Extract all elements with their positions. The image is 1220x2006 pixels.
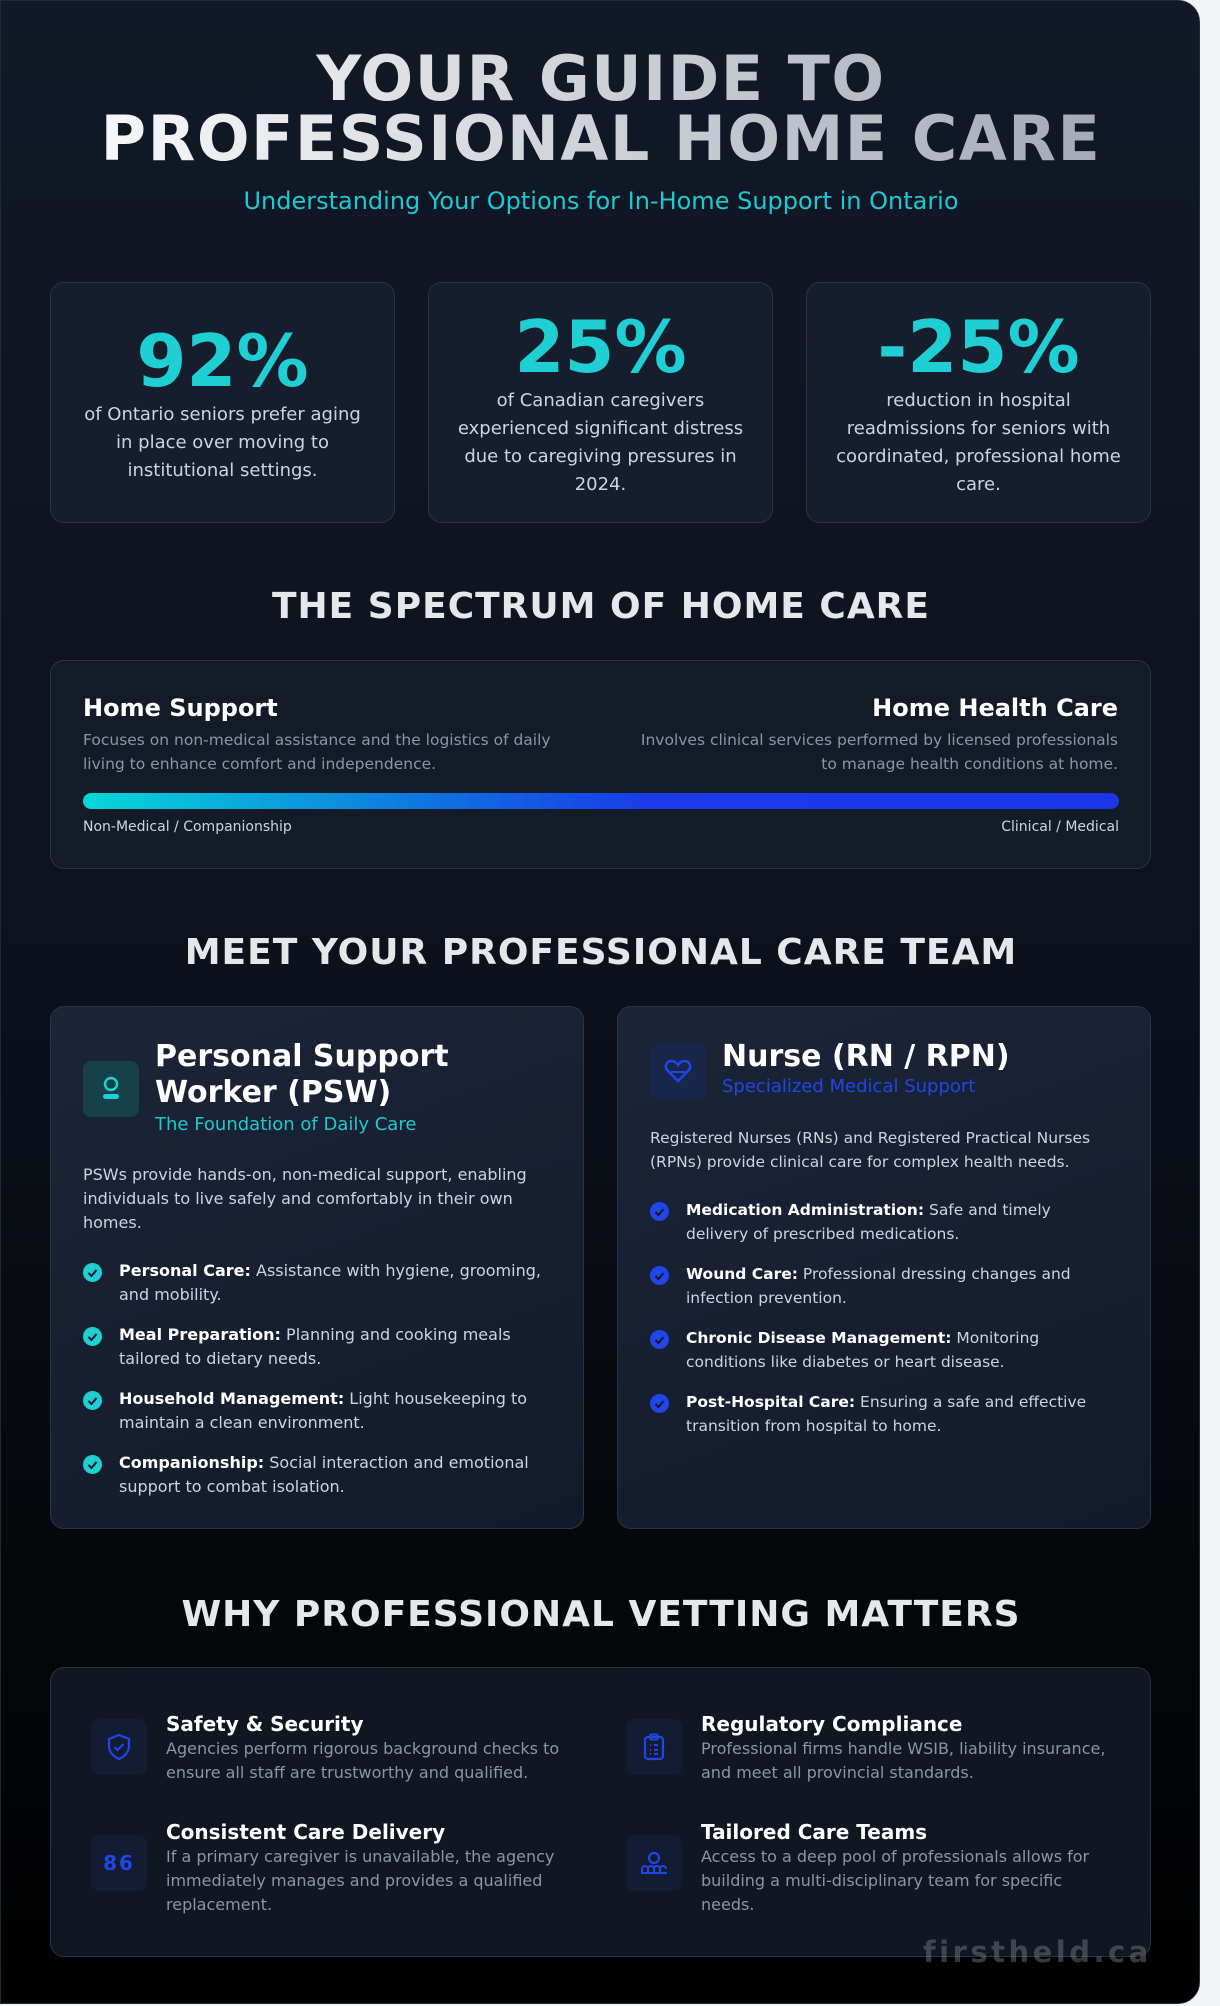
vetting item: tailored teams: Access to a deep pool of professionals allows for building a multi-disciplinary team for specific needs. bbox=[701, 1847, 1089, 1914]
panel: vetting bbox=[50, 1667, 1151, 1957]
list item: Post-Hospital Care: Ensuring a safe and effective transition from hospital to home. bbox=[686, 1393, 1086, 1435]
vetting item: consistent care: Consistent Care Delivery bbox=[166, 1820, 445, 1844]
vetting item: regulatory: Professional firms handle WSIB, liability insurance, and meet all provincial standards. bbox=[701, 1739, 1105, 1782]
title bbox=[1, 49, 1201, 169]
list item: Chronic Disease Management: Monitoring conditions like diabetes or heart disease. bbox=[686, 1329, 1039, 1371]
icon: person bbox=[83, 1061, 139, 1117]
heading: vetting: WHY PROFESSIONAL VETTING MATTERS bbox=[181, 1594, 1021, 1635]
vetting item: tailored teams bbox=[626, 1820, 1090, 1914]
list item: Personal Care: Assistance with hygiene, grooming, and mobility. bbox=[119, 1261, 541, 1304]
spectrum bar bbox=[83, 793, 1119, 809]
nurse description: Registered Nurses (RNs) and Registered Practical Nurses (RPNs) provide clinical care for complex health needs. bbox=[650, 1129, 1090, 1171]
icon: heart bbox=[650, 1043, 706, 1099]
icon: group bbox=[626, 1835, 682, 1891]
bar labels: Non-Medical / Companionship bbox=[83, 819, 292, 835]
PSW description: PSWs provide hands-on, non-medical support, enabling individuals to live safely and comfortably in their own homes. bbox=[83, 1165, 527, 1232]
vetting item: regulatory: Regulatory Compliance bbox=[701, 1712, 962, 1736]
list item: Companionship: Social interaction and emotional support to combat isolation. bbox=[119, 1453, 529, 1496]
watermark: firstheld.ca bbox=[923, 1935, 1152, 1969]
panel: Nurse card bbox=[617, 1006, 1151, 1529]
nurse title: Nurse (RN / RPN) bbox=[722, 1039, 1010, 1074]
stat card: -25%: reduction in hospital readmissions for seniors with coordinated, professional home care. bbox=[836, 390, 1121, 494]
stat card: 25%: 25% bbox=[514, 304, 687, 388]
stat card: 25% bbox=[428, 282, 773, 523]
list item: Wound Care: Professional dressing changes and infection prevention. bbox=[686, 1265, 1071, 1307]
PSW title: The Foundation of Daily Care bbox=[155, 1114, 416, 1135]
panel: spectrum bbox=[50, 660, 1151, 869]
PSW title: Personal Support Worker (PSW) bbox=[155, 1039, 449, 1110]
list item: Meal Preparation: Planning and cooking meals tailored to dietary needs. bbox=[119, 1325, 511, 1368]
home support text bbox=[83, 694, 551, 773]
icon: clipboard bbox=[626, 1719, 682, 1775]
nurse title bbox=[722, 1039, 1010, 1097]
stat card: 92% bbox=[50, 282, 395, 523]
vetting item: consistent care bbox=[91, 1820, 554, 1914]
title: YOUR GUIDE TO bbox=[316, 42, 886, 115]
nurse title: Specialized Medical Support bbox=[722, 1076, 975, 1097]
panel: PSW card bbox=[50, 1006, 584, 1529]
vetting item: safety bbox=[91, 1712, 559, 1782]
vetting item: safety: Safety & Security bbox=[166, 1712, 364, 1736]
vetting item: tailored teams: Tailored Care Teams bbox=[701, 1820, 927, 1844]
vetting item: safety: Agencies perform rigorous background checks to ensure all staff are trustworthy and qualified. bbox=[166, 1739, 559, 1782]
title: PROFESSIONAL HOME CARE bbox=[101, 102, 1101, 175]
stat card: 92%: 92% bbox=[136, 318, 309, 402]
home support text: Home Support bbox=[83, 694, 278, 722]
stat card: -25% bbox=[806, 282, 1151, 523]
icon: team bbox=[91, 1835, 147, 1891]
stat card: 25%: of Canadian caregivers experienced significant distress due to caregiving pressures in 2024. bbox=[458, 390, 743, 494]
list item: Medication Administration: Safe and timely delivery of prescribed medications. bbox=[686, 1201, 1051, 1243]
home support text: Focuses on non-medical assistance and the logistics of daily living to enhance comfort and independence. bbox=[83, 731, 551, 773]
vetting item: consistent care: If a primary caregiver is unavailable, the agency immediately manages and provides a qualified replacement. bbox=[166, 1847, 554, 1914]
vetting item: regulatory bbox=[626, 1712, 1105, 1782]
icon: shield bbox=[91, 1719, 147, 1775]
stat card: -25%: -25% bbox=[877, 304, 1080, 388]
list item: Household Management: Light housekeeping to maintain a clean environment. bbox=[119, 1389, 527, 1432]
bar labels: Clinical / Medical bbox=[1001, 819, 1119, 835]
bar labels bbox=[83, 819, 1119, 835]
stat card: 92%: of Ontario seniors prefer aging in place over moving to institutional settings. bbox=[84, 404, 361, 480]
home health care text bbox=[641, 694, 1118, 773]
icon: team: 86 bbox=[103, 1851, 135, 1875]
subtitle: Understanding Your Options for In-Home Support in Ontario bbox=[243, 187, 959, 215]
home health care text: Home Health Care bbox=[872, 694, 1118, 722]
heading: care team: MEET YOUR PROFESSIONAL CARE TEAM bbox=[185, 932, 1017, 973]
home health care text: Involves clinical services performed by licensed professionals to manage health conditions at home. bbox=[641, 731, 1118, 773]
heading: spectrum: THE SPECTRUM OF HOME CARE bbox=[272, 586, 930, 627]
